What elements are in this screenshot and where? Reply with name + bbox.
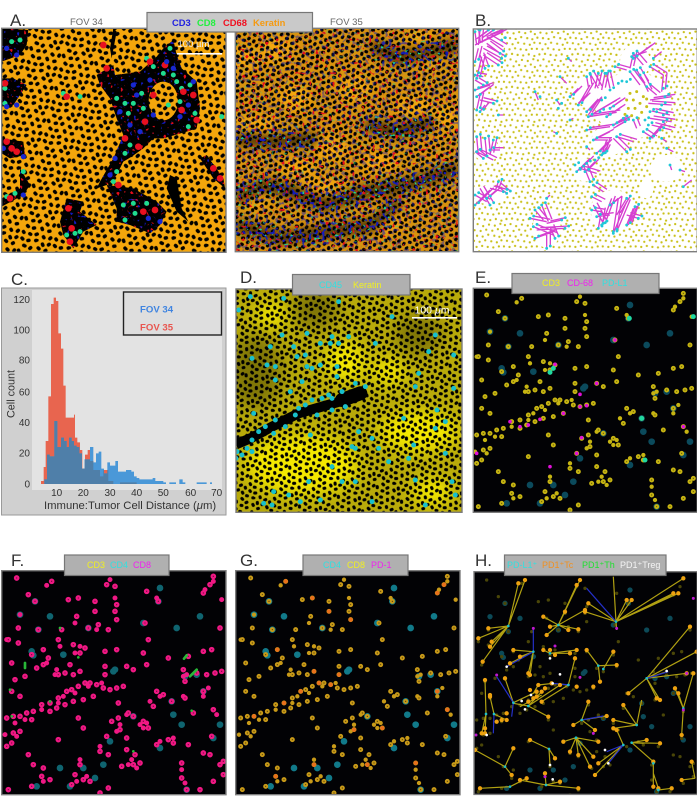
tumour cell nuclei holes [2,28,226,252]
caption FOV 34: FOV 34 [70,17,103,28]
legend box F: CD8 [133,560,151,570]
legend: FOV 35 [140,322,174,334]
legend box A: CD3 [172,17,191,28]
y axis labels: 40 [19,418,30,429]
PD-L1 cells [490,305,690,507]
chart frame [2,288,226,515]
panel letter G: G. [240,551,258,570]
x axis labels: 40 [131,488,143,499]
panel letter H: H. [475,551,492,570]
CD8 cells [5,576,223,793]
PD-1 positive cells [254,581,447,776]
legend box H: PD1⁺Treg [620,560,660,570]
legend box E: CD3 [542,278,560,288]
legend box E: CD-68 [567,278,593,288]
y axis labels: 100 [13,326,30,336]
CD45 cells [236,297,455,505]
CD3 cells [3,48,193,222]
panel H: PD-1 and PD-L1 interaction map [474,572,697,795]
caption FOV 35: FOV 35 [330,17,363,28]
x axis labels [51,488,223,499]
x axis labels: 50 [158,488,169,499]
inner ring of tumour cells [625,92,647,118]
legend box A: Keratin [253,17,286,28]
scale bar D [412,304,457,319]
immune-to-tumour links [475,28,692,248]
PD-1 positive Treg cells [487,658,667,779]
legend box G [303,555,408,576]
legend box H [504,555,666,576]
stroma infiltrate specks [2,28,226,252]
CD8 specks [235,28,459,252]
x axis labels: 70 [211,488,223,499]
CD8 cells [239,576,457,793]
immune cell dots [475,28,683,248]
nuclei holes [235,28,459,252]
legend box D: Keratin [353,280,382,290]
legend box E: PD-L1 [602,278,628,288]
CD68 specks [235,28,459,252]
y axis labels: 0 [24,480,30,490]
legend box H: PD1⁺Tc [542,560,574,570]
panel letter B: B. [475,11,491,30]
legend box H: PD1⁺Th [582,560,615,570]
dark vessel channel [236,400,345,444]
panel A left: FOV 34 image [2,28,226,252]
x axis labels: 60 [185,488,197,499]
legend box A [147,12,312,32]
scale bar A [177,39,222,55]
x axis labels: 20 [78,488,89,499]
y axis labels: 80 [19,356,30,366]
legend box F: CD3 [87,560,105,570]
y axis labels [13,295,30,490]
tumour cell dots [473,29,697,252]
bright keratin patches [232,28,457,233]
x axis title: Immune:Tumor Cell Distance (μm) [44,500,216,512]
legend box A: CD68 [223,17,247,28]
legend box H: PD-L1⁺ [507,560,538,570]
CD3 cells [475,293,693,510]
CD4 cells [20,588,220,790]
immune infiltrate bands [235,45,459,238]
legend box G: CD4 [323,560,341,570]
legend box G: CD8 [347,560,365,570]
CD4 cells [254,588,454,790]
panel letter A: A. [10,11,26,30]
y axis labels: 20 [19,448,30,460]
scale bar D: 100 μm [414,304,450,316]
panel F: CD3, CD4, CD8 image [2,571,226,795]
legend box D: CD45 [319,280,342,290]
legend [124,292,222,335]
panel B: cell distance map [469,28,697,252]
panel C: histogram of immune to tumour cell distance [2,288,226,515]
PD-1 positive cytotoxic cells [475,578,697,788]
legend box E [512,274,659,294]
panel letter E: E. [475,268,491,287]
PD-1 positive helper and magenta accent cells [476,598,693,777]
panel A right: FOV 35 image [232,28,459,252]
tumour islet [149,82,178,120]
legend box F: CD4 [110,560,128,570]
PD-L1 positive cells [486,622,683,790]
panel letter D: D. [240,268,257,287]
regulatory links [493,588,668,763]
bars [41,298,212,484]
x axis labels: 10 [51,488,63,499]
x axis labels: 30 [104,488,116,499]
y axis title: Cell count [6,370,18,418]
nuclei holes [236,289,462,512]
CD68 cells [5,45,220,242]
PD-1 to PD-L1 links [475,577,697,790]
legend box G: PD-1 [371,560,392,570]
scale bar A: 100 µm [178,39,209,50]
CD3 specks [235,28,459,252]
legend: FOV 34 [140,304,174,316]
panel letter C: C. [11,270,28,289]
legend box A: CD8 [197,17,216,28]
faint background cells [490,590,690,792]
CD8 cells [5,40,222,235]
panel letter F: F. [11,551,24,570]
bright keratin areas [245,303,459,505]
clearings around immune clusters [469,28,683,248]
y axis labels: 60 [19,388,30,398]
panel G: CD4, CD8, PD-1 image [236,571,460,795]
y axis labels: 120 [13,295,30,306]
plot area [32,290,222,490]
dark upper region [229,288,442,408]
legend box D [292,274,410,295]
green accent cells [10,628,197,751]
legend box F [64,555,169,576]
CD-68 cells [477,340,683,467]
bright cluster cells [550,317,693,460]
stroma regions [2,28,225,248]
panel E: CD3, CD-68, PD-L1 image [473,288,697,512]
panel D: CD45 and Keratin image [229,288,462,512]
